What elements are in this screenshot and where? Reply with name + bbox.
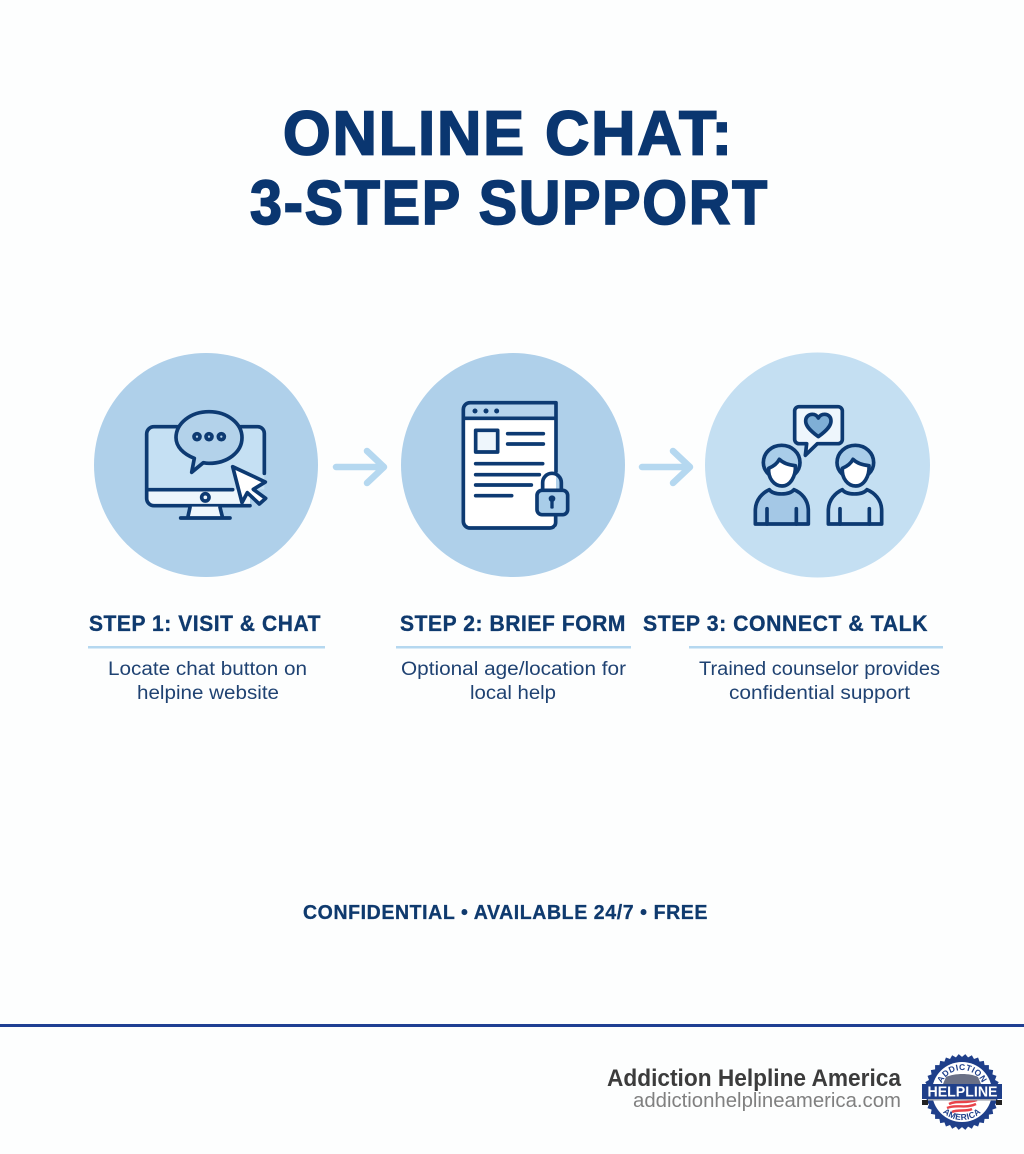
step heading: STEP 3: CONNECT & TALK (643, 611, 928, 636)
step description: Optional age/location for (401, 659, 627, 680)
step description (401, 659, 627, 704)
logo: helpline seal: AMERICA (942, 1109, 981, 1120)
title: 3-STEP SUPPORT (250, 169, 769, 238)
step description: helpine website (137, 683, 279, 704)
icon: two people with heart speech bubble (705, 352, 930, 578)
step heading: STEP 1: VISIT & CHAT (89, 611, 321, 636)
logo: helpline seal (922, 1054, 1002, 1130)
step description: local help (470, 683, 556, 704)
panel: step 1 (88, 353, 325, 704)
panel: step 3 (643, 352, 943, 704)
footer brand text (607, 1065, 902, 1112)
step heading: STEP 2: BRIEF FORM (400, 611, 626, 636)
footer brand text: addictionhelplineamerica.com (633, 1090, 901, 1112)
tagline: CONFIDENTIAL • AVAILABLE 24/7 • FREE (303, 902, 708, 924)
logo: helpline seal: HELPLINE (928, 1084, 998, 1100)
arrow: step 2 to step 3 (642, 451, 690, 483)
step description (108, 659, 307, 704)
footer brand text: Addiction Helpline America (607, 1065, 902, 1092)
icon: web form with padlock (401, 353, 625, 577)
step description (699, 659, 940, 704)
panel: step 2 (396, 353, 631, 704)
arrow: step 1 to step 2 (336, 451, 384, 483)
logo: helpline seal: ADDICTION (938, 1064, 987, 1084)
icon: monitor with chat bubble and cursor (94, 353, 318, 577)
title: ONLINE CHAT: (283, 100, 734, 168)
title (250, 100, 769, 238)
step description: confidential support (729, 683, 911, 704)
step description: Trained counselor provides (699, 659, 940, 680)
step description: Locate chat button on (108, 659, 307, 680)
